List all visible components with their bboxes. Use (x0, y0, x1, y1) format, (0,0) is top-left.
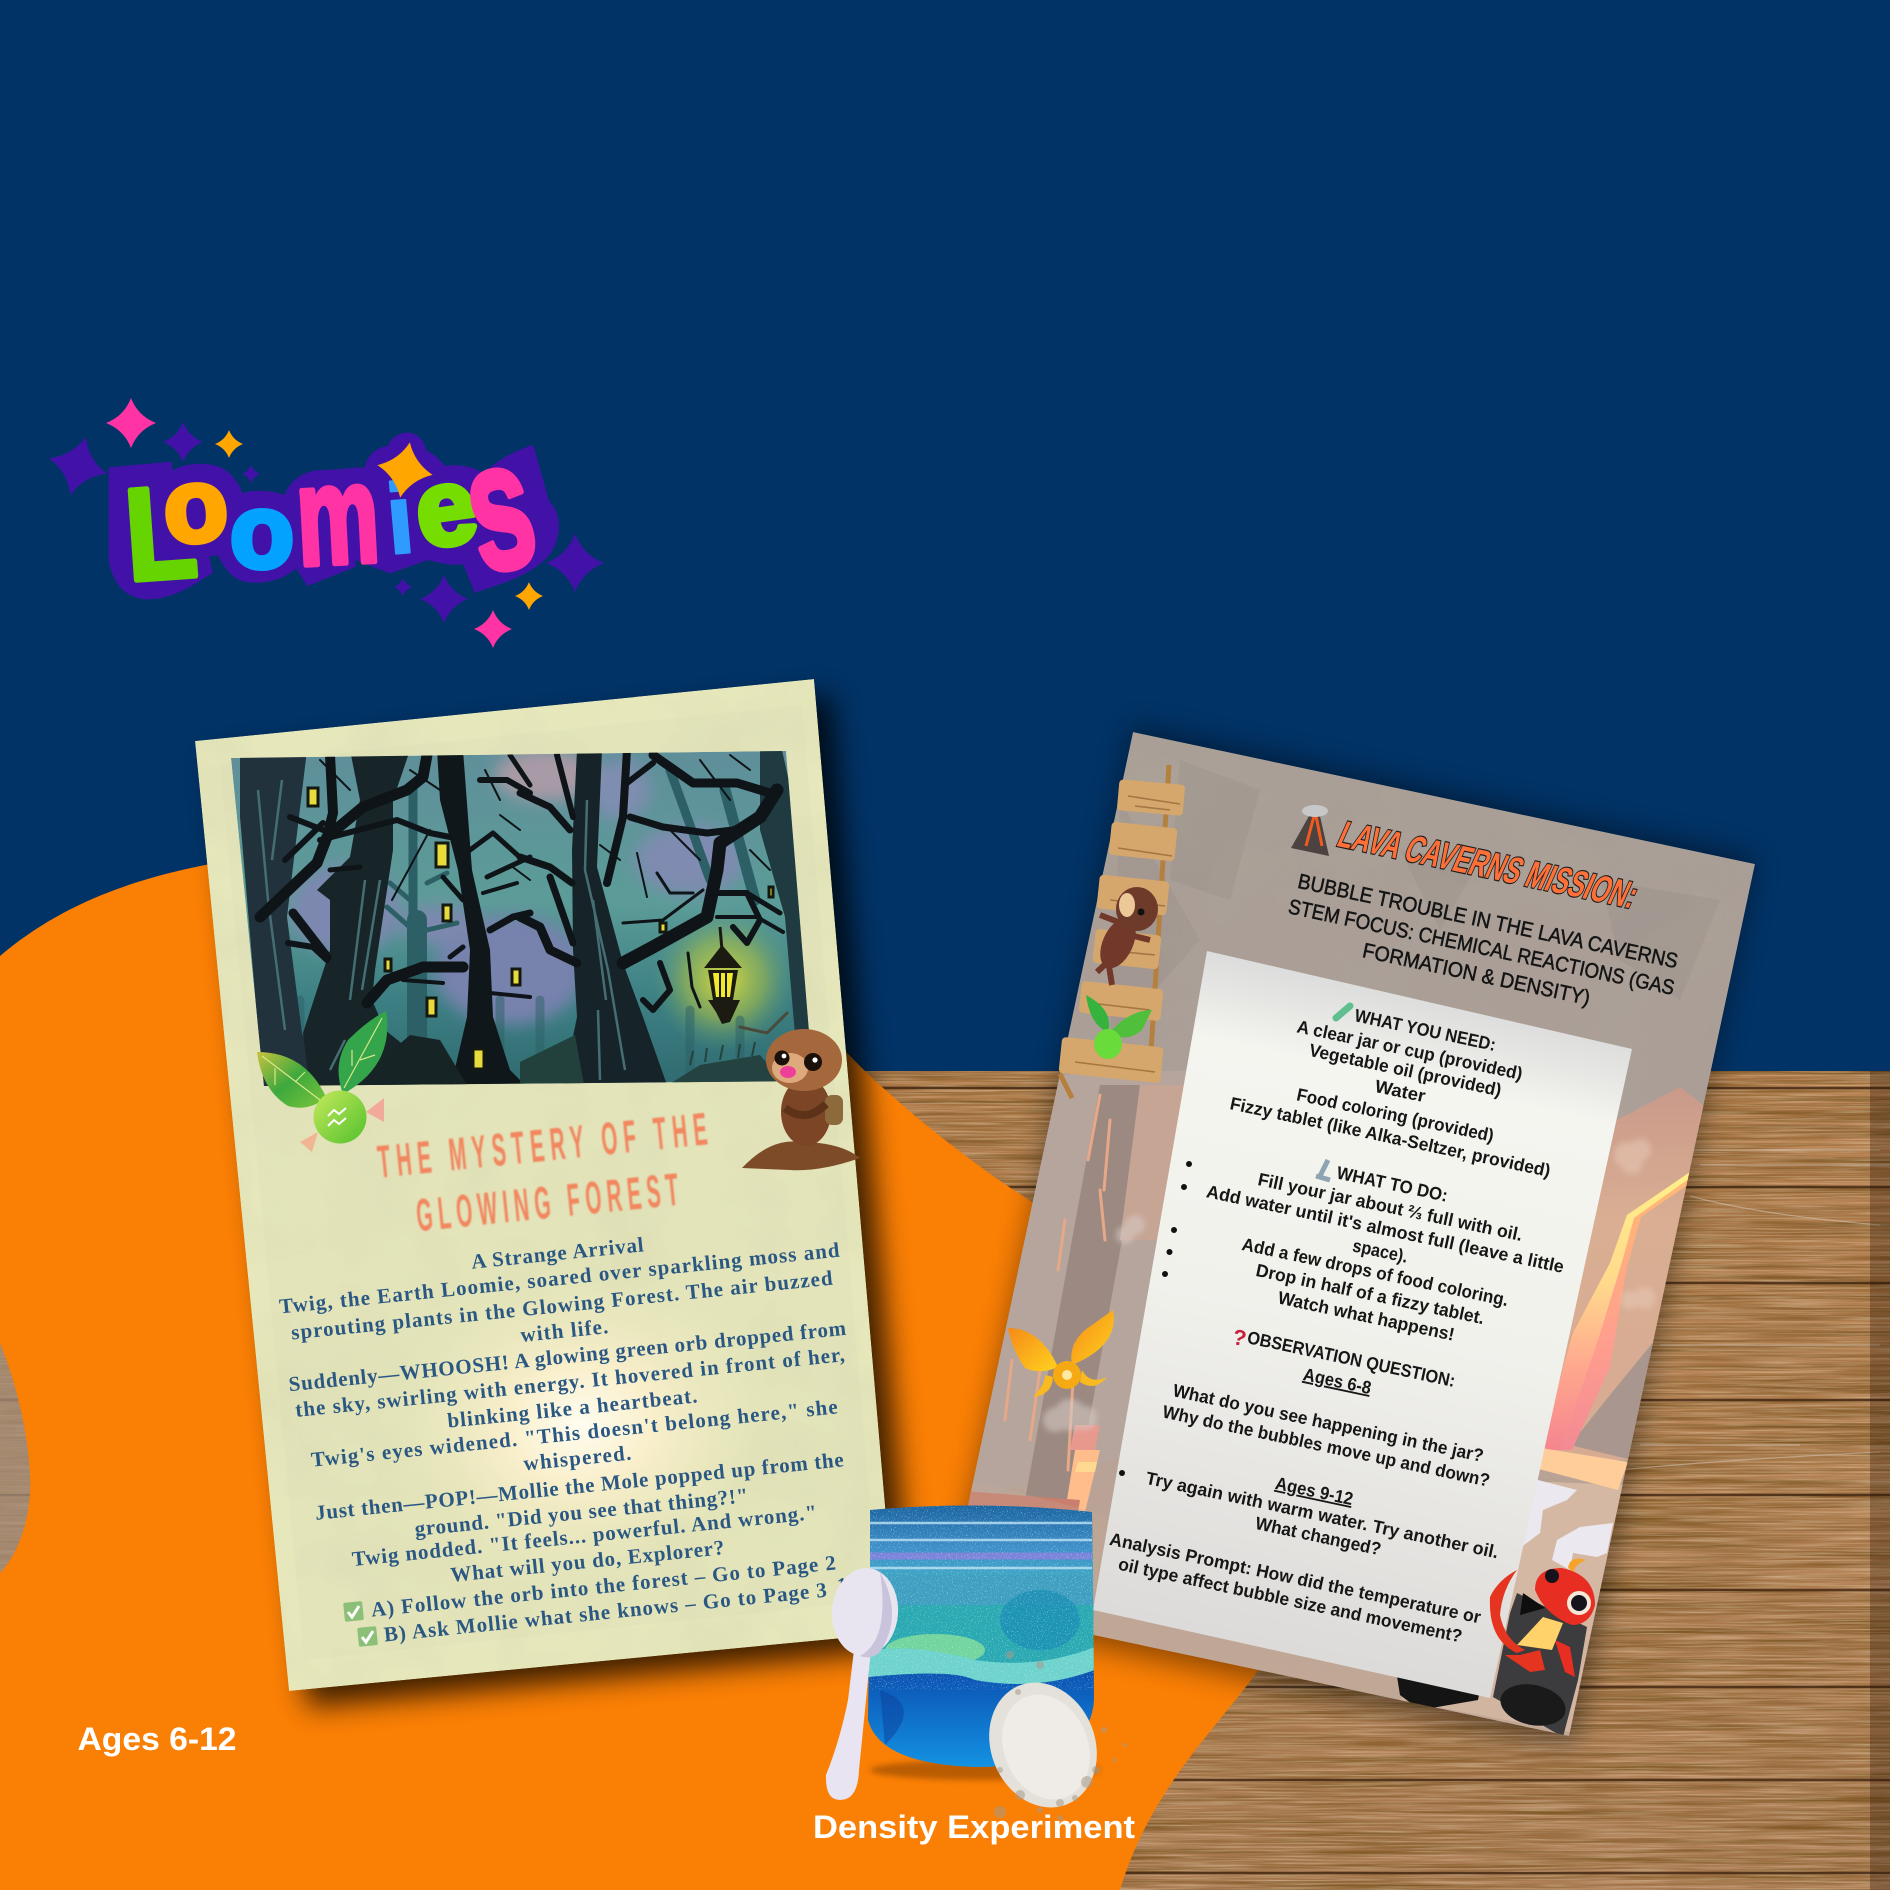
far trees (300, 770, 755, 1080)
panel: lava caverns mission page (945, 732, 1755, 1737)
instructions text: Drop in half of a fizzy tablet. (1254, 1260, 1486, 1328)
instructions text: Water (1373, 1076, 1427, 1106)
story text: What will you do, Explorer? (449, 1535, 725, 1587)
instructions text: Add a few drops of food coloring. (1240, 1234, 1510, 1310)
bottom band and coal (968, 1492, 1342, 1688)
lava flow (1559, 1172, 1690, 1450)
instructions text (1108, 1005, 1566, 1646)
story text: 1 (836, 1573, 849, 1598)
branches (260, 750, 787, 1033)
shadow of story page (213, 695, 914, 1707)
instructions text: space). (1351, 1236, 1410, 1267)
left cave wall with lava cracks (970, 1070, 1186, 1498)
mission subtitle: BUBBLE TROUBLE IN THE LAVA CAVERNS (1296, 870, 1680, 973)
icon: microscope (1316, 1160, 1330, 1180)
title: The Mystery of the Glowing Forest (375, 1103, 710, 1242)
story text: the sky, swirling with energy. It hovered in front of her, (294, 1342, 846, 1422)
instructions text: Try again with warm water. Try another oil. (1144, 1468, 1500, 1562)
instructions text: Fill your jar about ⅔ full with oil. (1256, 1169, 1524, 1245)
instructions text: WHAT TO DO: (1335, 1163, 1450, 1206)
logo letters (121, 401, 551, 612)
list bullets (1119, 1161, 1192, 1476)
story text: B) Ask Mollie what she knows – Go to Page 3 (383, 1578, 828, 1646)
story text: Twig nodded. "It feels... powerful. And wrong." (351, 1500, 818, 1571)
page background scene (945, 732, 1755, 1737)
logo letters: L (121, 458, 201, 609)
story text: A) Follow the orb into the forest – Go to Page 2 (370, 1551, 837, 1622)
left steam puffs (1043, 1215, 1145, 1432)
story text: Suddenly—WHOOSH! A glowing green orb dropped from (288, 1316, 848, 1396)
character: golden fairy (1008, 1310, 1114, 1397)
spoon (826, 1566, 901, 1800)
main trunks (240, 750, 812, 1090)
logo sparkles (41, 398, 604, 648)
label: Ages 6-12: Ages 6-12 (78, 1721, 236, 1757)
orange blob shape (0, 800, 1400, 1890)
mission subtitle: STEM FOCUS: CHEMICAL REACTIONS (GAS (1286, 895, 1676, 1000)
label: Density Experiment: Density Experiment (813, 1809, 1135, 1845)
shadow of mission page (947, 726, 1755, 1748)
logo letters: e (408, 443, 484, 571)
right mountain (1554, 1087, 1704, 1460)
title: The Mystery of the Glowing Forest: THE MYSTERY OF THE (375, 1103, 710, 1188)
white instruction sheet (1093, 951, 1632, 1698)
character: green fairy (1086, 995, 1152, 1059)
character: red fire lizard (1490, 1559, 1595, 1677)
story text: whispered. (522, 1441, 632, 1475)
character: mole climbing (1093, 887, 1158, 985)
instructions text: A clear jar or cup (provided) (1295, 1016, 1524, 1084)
mission subtitle: FORMATION & DENSITY) (1360, 939, 1592, 1010)
story text: Just then—POP!—Mollie the Mole popped up from the (314, 1447, 845, 1525)
illustration: glowing forest (231, 749, 813, 1090)
forest floor (356, 1035, 776, 1086)
instructions text: Add water until it's almost full (leave a little (1205, 1181, 1566, 1277)
instructions text: oil type affect bubble size and movement? (1117, 1554, 1464, 1646)
instructions text: What do you see happening in the jar? (1171, 1380, 1485, 1466)
icon: green checkboxes (343, 1601, 378, 1647)
instructions text: Food coloring (provided) (1295, 1084, 1496, 1146)
icon: test tube (1336, 1006, 1350, 1018)
jar: density experiment (826, 1500, 1127, 1824)
lanterns (308, 788, 773, 1069)
story text (278, 1232, 849, 1646)
story text: blinking like a heartbeat. (446, 1383, 698, 1433)
instructions text: Analysis Prompt: How did the temperature or (1108, 1529, 1483, 1627)
story text: with life. (519, 1314, 609, 1347)
story text: ground. "Did you see that thing?!" (413, 1483, 749, 1541)
cave facets (1110, 760, 1720, 1040)
jar shadow (870, 1760, 1100, 1780)
instructions text: What changed? (1254, 1513, 1383, 1559)
mission title: LAVA CAVERNS MISSION: (1331, 815, 1645, 917)
logo letters: o (230, 474, 294, 590)
story text: sprouting plants in the Glowing Forest. The air buzzed (290, 1266, 834, 1344)
instructions text: WHAT YOU NEED: (1353, 1005, 1498, 1055)
instructions text: Ages 6-8 (1301, 1364, 1373, 1398)
logo purple backing (108, 433, 559, 599)
instructions text: Fizzy tablet (like Alka-Seltzer, provided) (1228, 1093, 1552, 1181)
instructions text: Ages 9-12 (1274, 1473, 1355, 1509)
story text: Twig, the Earth Loomie, soared over sparkling moss and (278, 1238, 841, 1318)
character: earth fairy Twig (257, 1011, 387, 1152)
logo letters: m (292, 436, 383, 596)
steam puffs (1614, 1139, 1656, 1309)
icon: red question mark: ? (1230, 1324, 1249, 1351)
logo letters: i (381, 462, 419, 576)
instructions text: OBSERVATION QUESTION: (1245, 1327, 1457, 1391)
story text: A Strange Arrival (470, 1232, 645, 1274)
glass jar with liquid layers (860, 1500, 1100, 1772)
logo: Loomies (41, 398, 604, 648)
icon: volcano (1291, 805, 1329, 856)
logo letters: s (447, 401, 551, 612)
panel: story page (195, 679, 896, 1691)
instructions text: Watch what happens! (1276, 1288, 1456, 1345)
title: The Mystery of the Glowing Forest: GLOWING FOREST (414, 1164, 681, 1242)
character: Mollie the mole on dirt mound (742, 1029, 860, 1170)
story text: Twig's eyes widened. "This doesn't belong here," she (310, 1394, 839, 1472)
paper sheet (195, 679, 896, 1691)
fizzy tablet with bubbles (971, 1651, 1127, 1824)
logo letters: o (160, 446, 231, 566)
lower rock, lava band, steam (1400, 1480, 1625, 1736)
instructions text: Vegetable oil (provided) (1307, 1040, 1503, 1100)
instructions text: Why do the bubbles move up and down? (1161, 1402, 1492, 1491)
ladder (1058, 765, 1185, 1098)
wood table background (0, 1071, 1890, 1890)
